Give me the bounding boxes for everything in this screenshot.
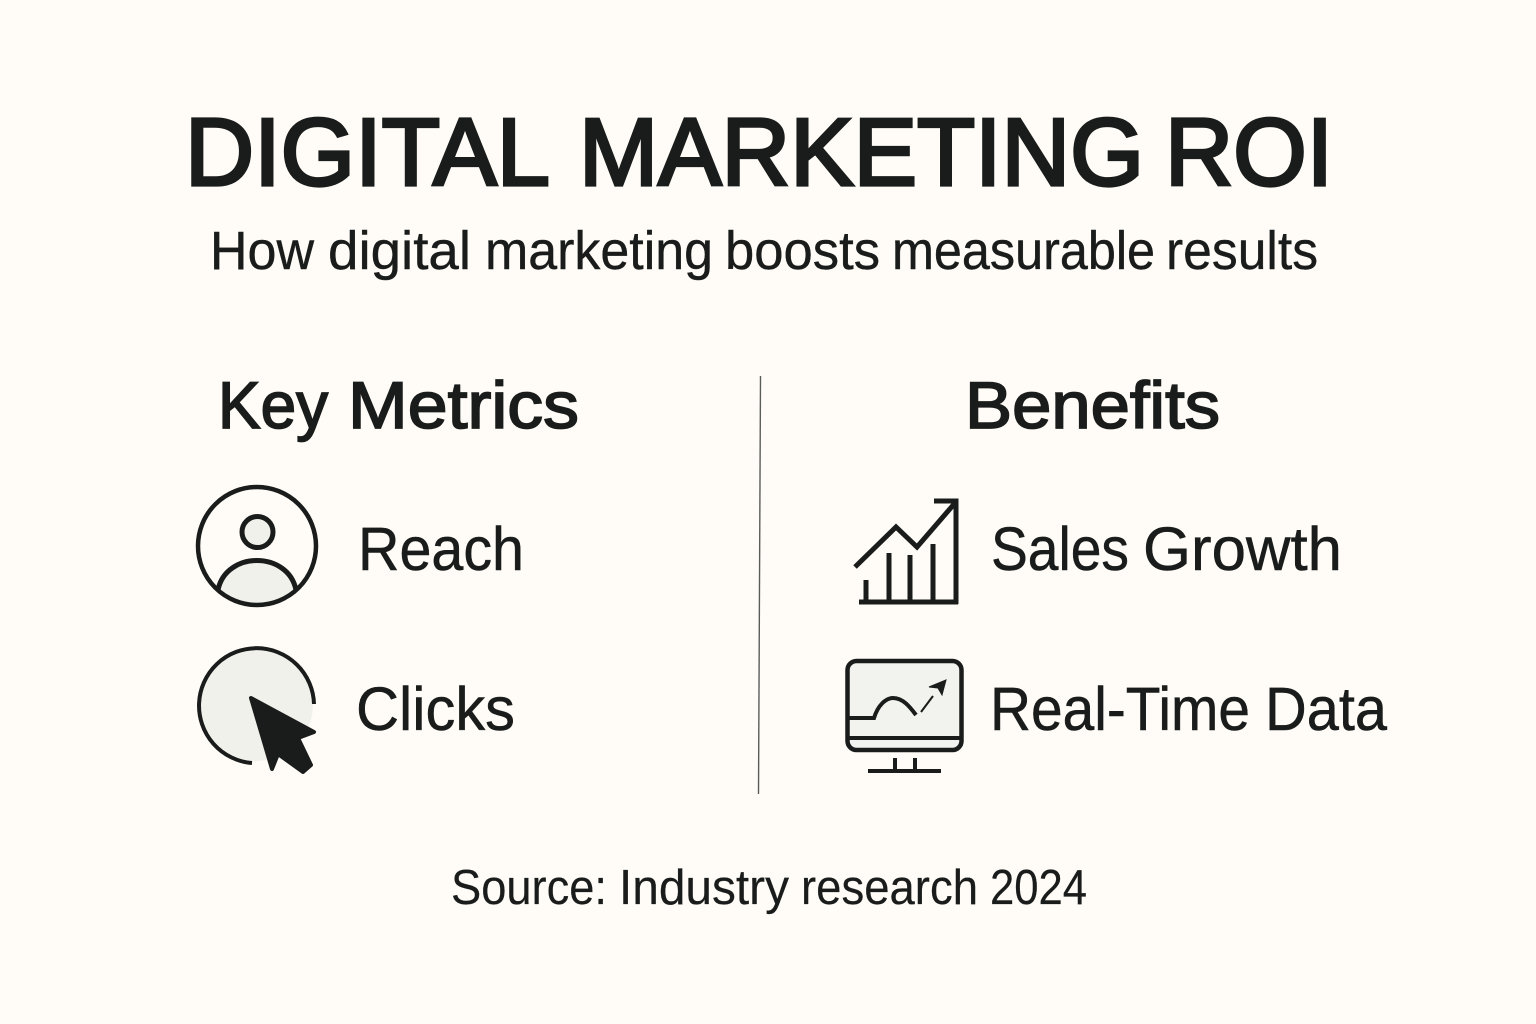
subtitle: boosts — [725, 221, 880, 281]
source note: Source: — [451, 861, 607, 915]
subtitle: measurable — [892, 221, 1155, 281]
title: DIGITAL — [185, 99, 550, 206]
panel: benefits — [848, 368, 1387, 771]
title: MARKETING — [579, 99, 1144, 206]
label: sales growth — [991, 515, 1342, 583]
subtitle: How — [210, 221, 315, 281]
label: sales growth: Sales — [991, 515, 1129, 583]
heading: key metrics: Key — [218, 368, 328, 442]
icon: sales growth chart — [855, 501, 958, 604]
icon: real-time data monitor — [848, 661, 962, 771]
subtitle: marketing — [485, 221, 713, 281]
title — [185, 99, 1333, 206]
source note — [451, 861, 1087, 915]
icon: reach person in circle — [198, 487, 316, 605]
label: real-time data: Data — [1265, 675, 1387, 743]
title: ROI — [1165, 99, 1333, 206]
heading: key metrics — [218, 368, 579, 442]
source note: Industry — [619, 861, 789, 915]
source note: 2024 — [990, 861, 1087, 915]
heading: key metrics: Metrics — [348, 368, 579, 442]
label: sales growth: Growth — [1143, 515, 1342, 583]
panel: key metrics — [198, 368, 579, 772]
divider between columns — [758, 376, 760, 794]
label: real-time data: Real-Time — [990, 675, 1250, 743]
subtitle: results — [1166, 221, 1318, 281]
subtitle: digital — [328, 221, 471, 281]
heading: benefits: Benefits — [965, 368, 1220, 442]
label: reach: Reach — [358, 515, 524, 583]
source note: research — [801, 861, 978, 915]
icon: clicks cursor in circle — [199, 648, 314, 772]
subtitle — [210, 221, 1318, 281]
label: clicks: Clicks — [356, 675, 515, 743]
